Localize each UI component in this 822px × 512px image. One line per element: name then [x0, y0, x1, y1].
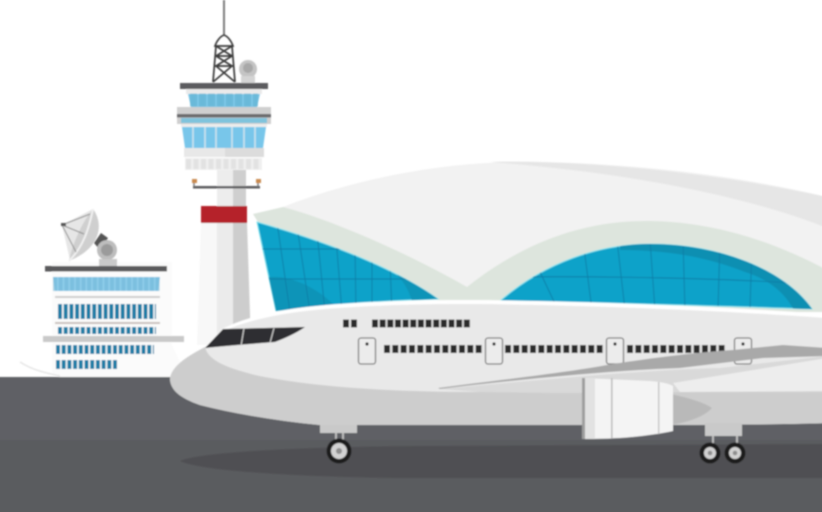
engine [582, 378, 673, 439]
control tower [177, 0, 271, 348]
window row [58, 327, 156, 334]
balcony [177, 107, 271, 124]
ground [0, 377, 822, 512]
building ledge [43, 336, 184, 342]
terminal right glass [500, 240, 815, 312]
window row [56, 360, 118, 369]
upper windows [188, 94, 260, 107]
satellite dish [61, 209, 117, 266]
tower shaft upper [217, 170, 246, 206]
building roof [45, 266, 167, 272]
doors [358, 338, 752, 364]
terminal left glass [255, 222, 438, 312]
terminal roof [253, 162, 822, 312]
fuselage [170, 300, 822, 425]
engine exhaust [670, 394, 712, 425]
landing gear main [700, 423, 746, 464]
top window band [53, 277, 160, 291]
lattice mast [213, 35, 235, 82]
antenna [223, 0, 225, 36]
main deck windows [384, 345, 725, 353]
green arches [253, 207, 822, 312]
left building [20, 209, 184, 377]
belly [170, 347, 822, 425]
window row [58, 304, 156, 319]
upper deck windows [343, 320, 471, 328]
main tower windows [182, 127, 266, 148]
tower collar [184, 148, 264, 170]
airplane [170, 300, 822, 464]
tower shaft lower [197, 223, 251, 348]
red band [201, 206, 247, 223]
tower roof [180, 83, 268, 89]
landing gear nose [320, 425, 357, 464]
windshield [205, 327, 305, 348]
tower arm [192, 179, 261, 188]
ground shadow [180, 444, 822, 478]
radar dome [239, 60, 257, 83]
wing [438, 345, 822, 393]
window row [56, 345, 154, 354]
door portholes [365, 342, 745, 346]
roof shaded band [490, 162, 822, 228]
